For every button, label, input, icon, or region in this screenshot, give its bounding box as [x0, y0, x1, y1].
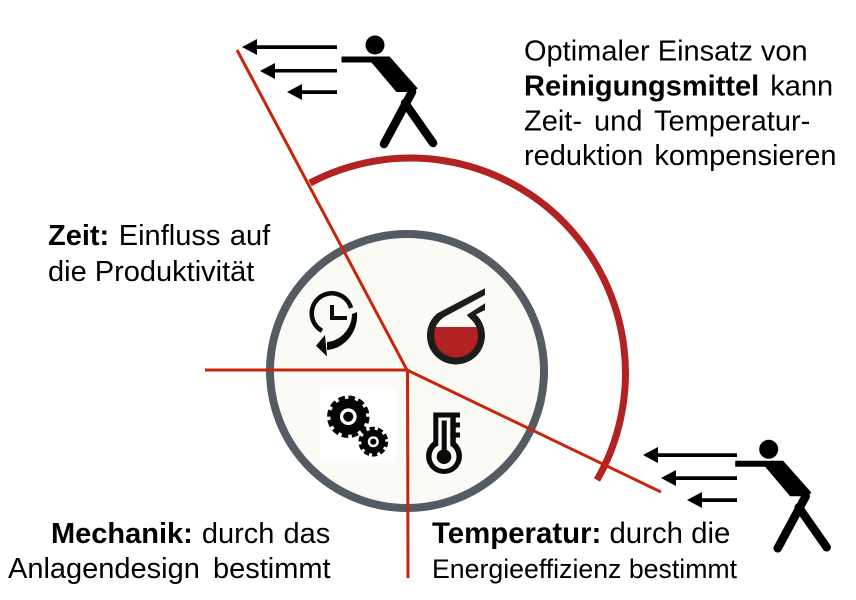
icon: gears: [320, 388, 396, 463]
text: time: die Produktivität: [48, 256, 254, 288]
text: mechanics: Mechanik: durch das: [51, 518, 330, 550]
arrows: top force: [242, 39, 337, 100]
text: mechanics: [8, 518, 331, 585]
text: detergent: reduktion kompensieren: [524, 140, 837, 172]
sector divider lines: [205, 50, 661, 578]
text: temperature: Temperatur: durch die: [432, 517, 730, 550]
text: detergent: Zeit- und Temperatur-: [524, 106, 810, 138]
icon: clock with arrow: [312, 293, 357, 356]
text: detergent: Reinigungsmittel kann: [524, 70, 833, 102]
text: time: Zeit: Einfluss auf: [48, 220, 271, 252]
red arc: detergent sector: [310, 158, 625, 480]
text: time: [48, 220, 271, 288]
text: mechanics: Anlagendesign bestimmt: [8, 553, 331, 585]
figure pushing left, top: [342, 36, 433, 144]
main circle: [270, 234, 544, 508]
arrows: bottom force: [643, 447, 737, 508]
icon: detergent flask: [427, 288, 485, 364]
icon: thermometer: [426, 412, 462, 474]
text: detergent: Optimaler Einsatz von: [524, 36, 808, 68]
figure pushing left, bottom: [736, 440, 827, 548]
text: detergent: [524, 36, 837, 172]
text: temperature: [432, 517, 738, 584]
text: temperature: Energieeffizienz bestimmt: [432, 554, 738, 584]
